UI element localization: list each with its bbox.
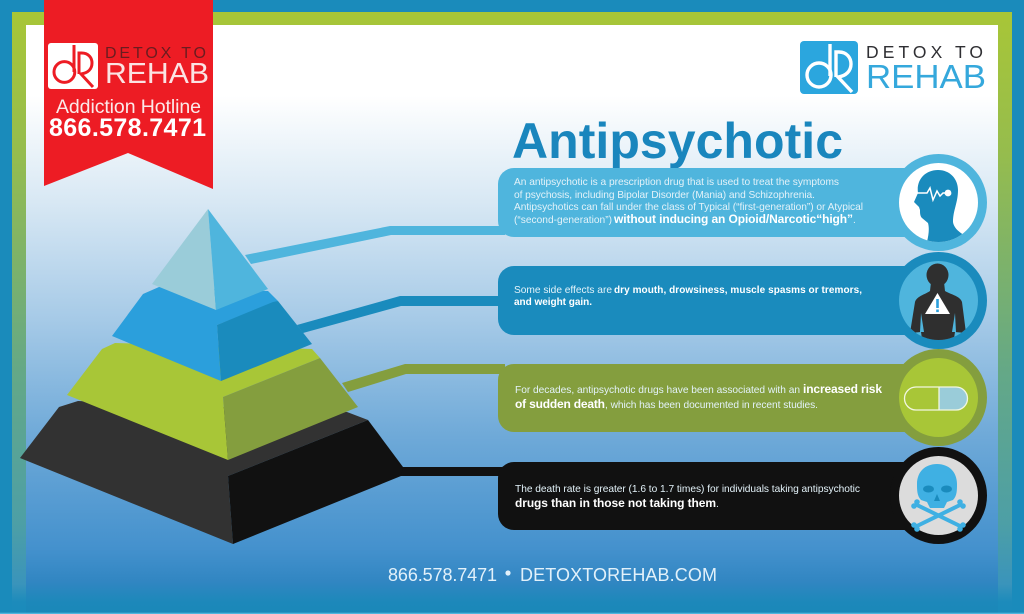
logo top right: DETOX TO (866, 42, 983, 62)
panel: death rate (498, 447, 987, 544)
pyramid tier: black base (20, 401, 403, 544)
pyramid tier: blue (112, 287, 312, 381)
title: Antipsychotic (512, 113, 843, 169)
definition text (514, 177, 863, 226)
ribbon logo text: REHAB (105, 58, 209, 90)
definition text: . (853, 215, 856, 226)
icon: torso with warning (890, 252, 987, 349)
icon: pill (890, 349, 987, 446)
death rate text: . (716, 499, 719, 510)
risk text: increased risk (803, 382, 882, 396)
ribbon logo text: DETOX TO (105, 45, 206, 62)
logo top right (800, 41, 986, 95)
connector lines (245, 226, 510, 476)
footer contact line (388, 565, 717, 585)
footer contact line: 866.578.7471 (388, 565, 497, 585)
risk text: , which has been documented in recent studies. (605, 400, 818, 411)
icon: skull and crossbones (890, 447, 987, 544)
death rate text: drugs than in those not taking them (515, 496, 716, 510)
death rate text (515, 484, 860, 510)
side effects text: dry mouth, drowsiness, muscle spasms or tremors, (614, 285, 862, 296)
side effects text: Some side effects are (514, 285, 612, 296)
side effects text (514, 285, 862, 308)
panel: side effects (498, 252, 987, 349)
definition text: An antipsychotic is a prescription drug that is used to treat the symptoms (514, 177, 839, 188)
ribbon logo text (105, 45, 209, 90)
hotline label: Addiction Hotline (56, 96, 201, 118)
side effects text: and weight gain. (514, 297, 592, 308)
risk text (515, 382, 882, 411)
ribbon: addiction hotline (44, 0, 213, 189)
definition text: without inducing an Opioid/Narcotic“high” (613, 212, 853, 226)
risk text: of sudden death (515, 397, 605, 411)
footer contact line: DETOXTOREHAB.COM (520, 565, 717, 585)
definition text: Antipsychotics can fall under the class of Typical (“first-generation”) or Atypical (514, 202, 863, 213)
icon: head with pulse (899, 154, 987, 251)
panel: sudden death risk (498, 349, 987, 446)
hotline number: 866.578.7471 (49, 114, 206, 142)
icon: ribbon logo mark (48, 43, 98, 89)
definition text: of psychosis, including Bipolar Disorder (Mania) and Schizophrenia. (514, 190, 815, 201)
pyramid tier: green (67, 343, 358, 460)
panel: definition (498, 154, 987, 252)
icon: logo mark (800, 41, 858, 94)
risk text: For decades, antipsychotic drugs have been associated with an (515, 385, 800, 396)
pyramid tier: light blue top (152, 209, 268, 310)
logo top right: REHAB (866, 58, 986, 95)
definition text: (“second-generation”) (514, 215, 612, 226)
pyramid (20, 209, 403, 544)
death rate text: The death rate is greater (1.6 to 1.7 times) for individuals taking antipsychotic (515, 484, 860, 495)
